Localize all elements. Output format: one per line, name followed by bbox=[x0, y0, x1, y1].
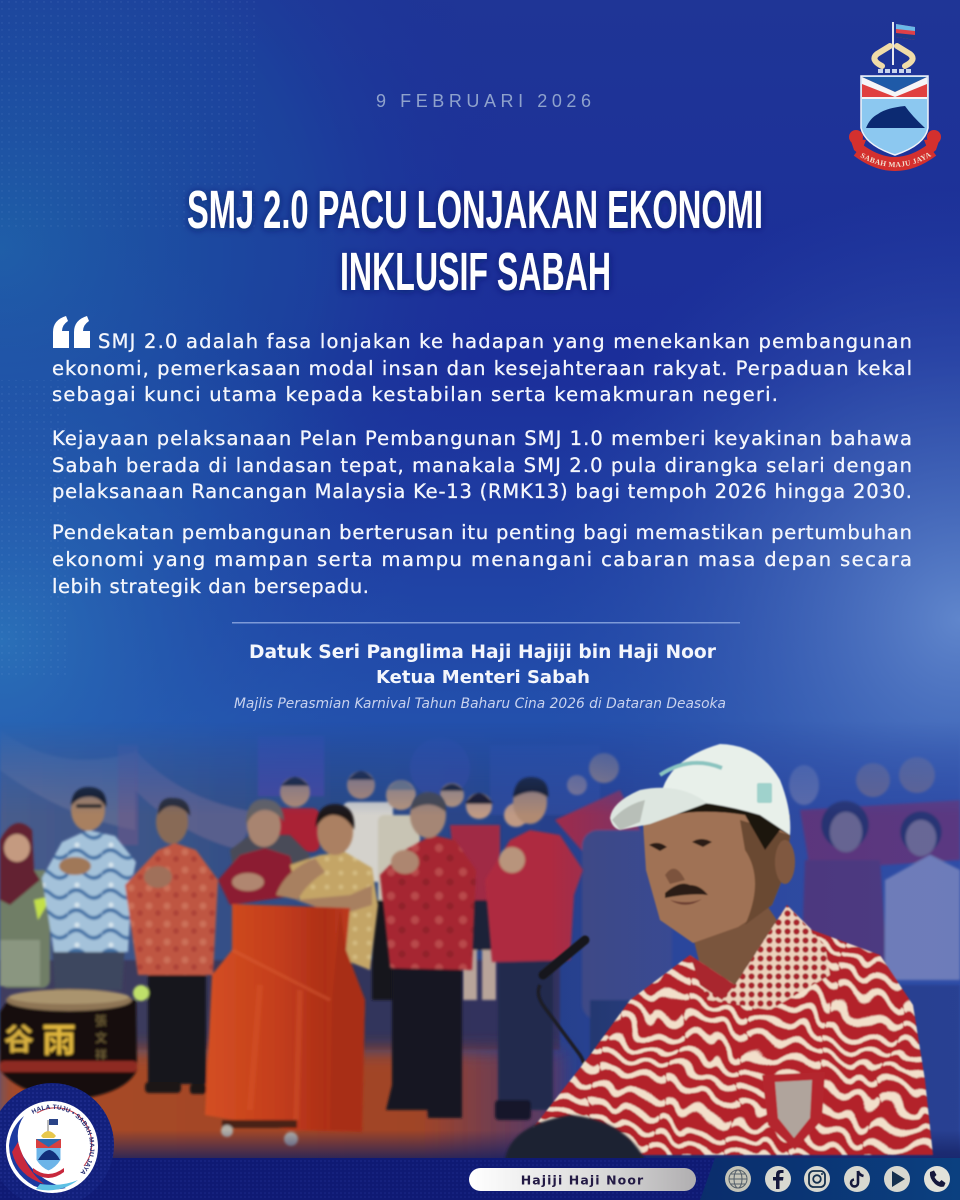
icon: instagram bbox=[804, 1166, 830, 1192]
blue wash over right of stage bbox=[568, 754, 960, 1154]
paragraph 3 bbox=[52, 521, 912, 598]
hands gripping pole bbox=[874, 46, 913, 66]
back row people bbox=[278, 752, 672, 1055]
ribbon: SABAH MAJU JAYA bbox=[860, 152, 932, 168]
flag bbox=[893, 22, 915, 65]
ear bbox=[775, 840, 795, 884]
icon: website globe bbox=[725, 1166, 751, 1192]
ribbon bbox=[849, 130, 941, 171]
small crest bbox=[33, 1119, 64, 1178]
bottom bar bbox=[0, 1158, 960, 1200]
name pill bbox=[469, 1168, 696, 1191]
paragraph 2: pelaksanaan Rancangan Malaysia Ke-13 (RMK13) bagi tempoh 2026 hingga 2030. bbox=[52, 480, 912, 503]
drum: 雨 bbox=[42, 1022, 76, 1060]
paragraph 1: SMJ 2.0 adalah fasa lonjakan ke hadapan yang menekankan pembangunan bbox=[98, 330, 912, 353]
title bbox=[187, 180, 763, 302]
photo: launch ceremony on stage bbox=[0, 715, 960, 1180]
lectern bbox=[505, 1115, 645, 1160]
cap bbox=[610, 744, 790, 835]
person: deep red batik bbox=[380, 792, 476, 1118]
attribution: Ketua Menteri Sabah bbox=[376, 668, 590, 688]
person: gold shirt bbox=[276, 804, 378, 970]
hair under cap bbox=[640, 800, 790, 850]
drum: 張 bbox=[95, 1014, 107, 1028]
shield bbox=[861, 76, 928, 155]
badge: Hala Tuju Sabah Maju Jaya bbox=[0, 1083, 114, 1198]
front row people bbox=[0, 757, 960, 1155]
quote mark bbox=[53, 316, 90, 348]
attribution: Datuk Seri Panglima Haji Hajiji bin Haji Noor bbox=[249, 642, 717, 663]
paragraph 2: Sabah berada di landasan tepat, manakala SMJ 2.0 pula dirangka selari dengan bbox=[52, 454, 912, 477]
paragraph 3: Pendekatan pembangunan berterusan itu penting bagi memastikan pertumbuhan bbox=[52, 521, 912, 544]
badge: Hala Tuju Sabah Maju Jaya: HALA TUJU • SABAH MAJU JAYA bbox=[31, 1104, 94, 1174]
paragraph 2 bbox=[52, 427, 912, 503]
paragraph 1: ekonomi, pemerkasaan modal insan dan kesejahteraan rakyat. Perpaduan kekal bbox=[52, 357, 912, 380]
pocket badge bbox=[762, 1072, 825, 1150]
paragraph 1 bbox=[52, 330, 912, 406]
logo: Sabah state crest bbox=[849, 22, 941, 171]
icon: youtube play bbox=[884, 1166, 910, 1192]
person: blue batik bbox=[42, 787, 136, 990]
paragraph 1: sebagai kunci utama kepada kestabilan serta kemakmuran negeri. bbox=[52, 383, 778, 406]
podium draped in red bbox=[205, 904, 365, 1146]
stage backdrop bbox=[0, 736, 959, 1134]
paragraph 3: ekonomi yang mampan serta mampu menangani cabaran masa depan secara bbox=[52, 548, 912, 571]
icon: tiktok bbox=[844, 1166, 870, 1192]
drum: 谷 bbox=[4, 1024, 34, 1057]
person: orange-red batik bbox=[125, 798, 218, 1094]
name pill: Hajiji Haji Noor bbox=[521, 1172, 644, 1188]
microphone bbox=[538, 940, 593, 1120]
beads bbox=[878, 69, 911, 73]
neck bbox=[690, 895, 780, 985]
right crowd bbox=[789, 757, 960, 1155]
attribution: Majlis Perasmian Karnival Tahun Baharu Cina 2026 di Dataran Deasoka bbox=[234, 696, 726, 712]
mustache bbox=[665, 884, 708, 898]
drum: 文 bbox=[95, 1030, 107, 1045]
main figure: Datuk Seri Hajiji speaking bbox=[534, 743, 934, 1156]
drum: 祥 bbox=[95, 1048, 107, 1062]
eyes bbox=[649, 843, 667, 851]
person: maroon shirt with grey jacket behind bbox=[218, 799, 310, 905]
date: 9 FEBRUARI 2026 bbox=[376, 91, 591, 111]
icon: phone bbox=[924, 1166, 950, 1192]
attribution bbox=[234, 642, 726, 712]
drum bbox=[0, 985, 149, 1100]
person: woman in hijab bbox=[0, 823, 52, 988]
paragraph 3: lebih strategik dan bersepadu. bbox=[52, 575, 369, 598]
floor bbox=[0, 1050, 565, 1180]
shirt bbox=[534, 904, 934, 1156]
paragraph 2: Kejayaan pelaksanaan Pelan Pembangunan SMJ 1.0 memberi keyakinan bahawa bbox=[52, 427, 912, 450]
title: INKLUSIF SABAH bbox=[340, 242, 611, 302]
icon: facebook bbox=[765, 1166, 791, 1192]
face bbox=[643, 808, 790, 943]
person: red jacket bbox=[485, 777, 583, 1120]
